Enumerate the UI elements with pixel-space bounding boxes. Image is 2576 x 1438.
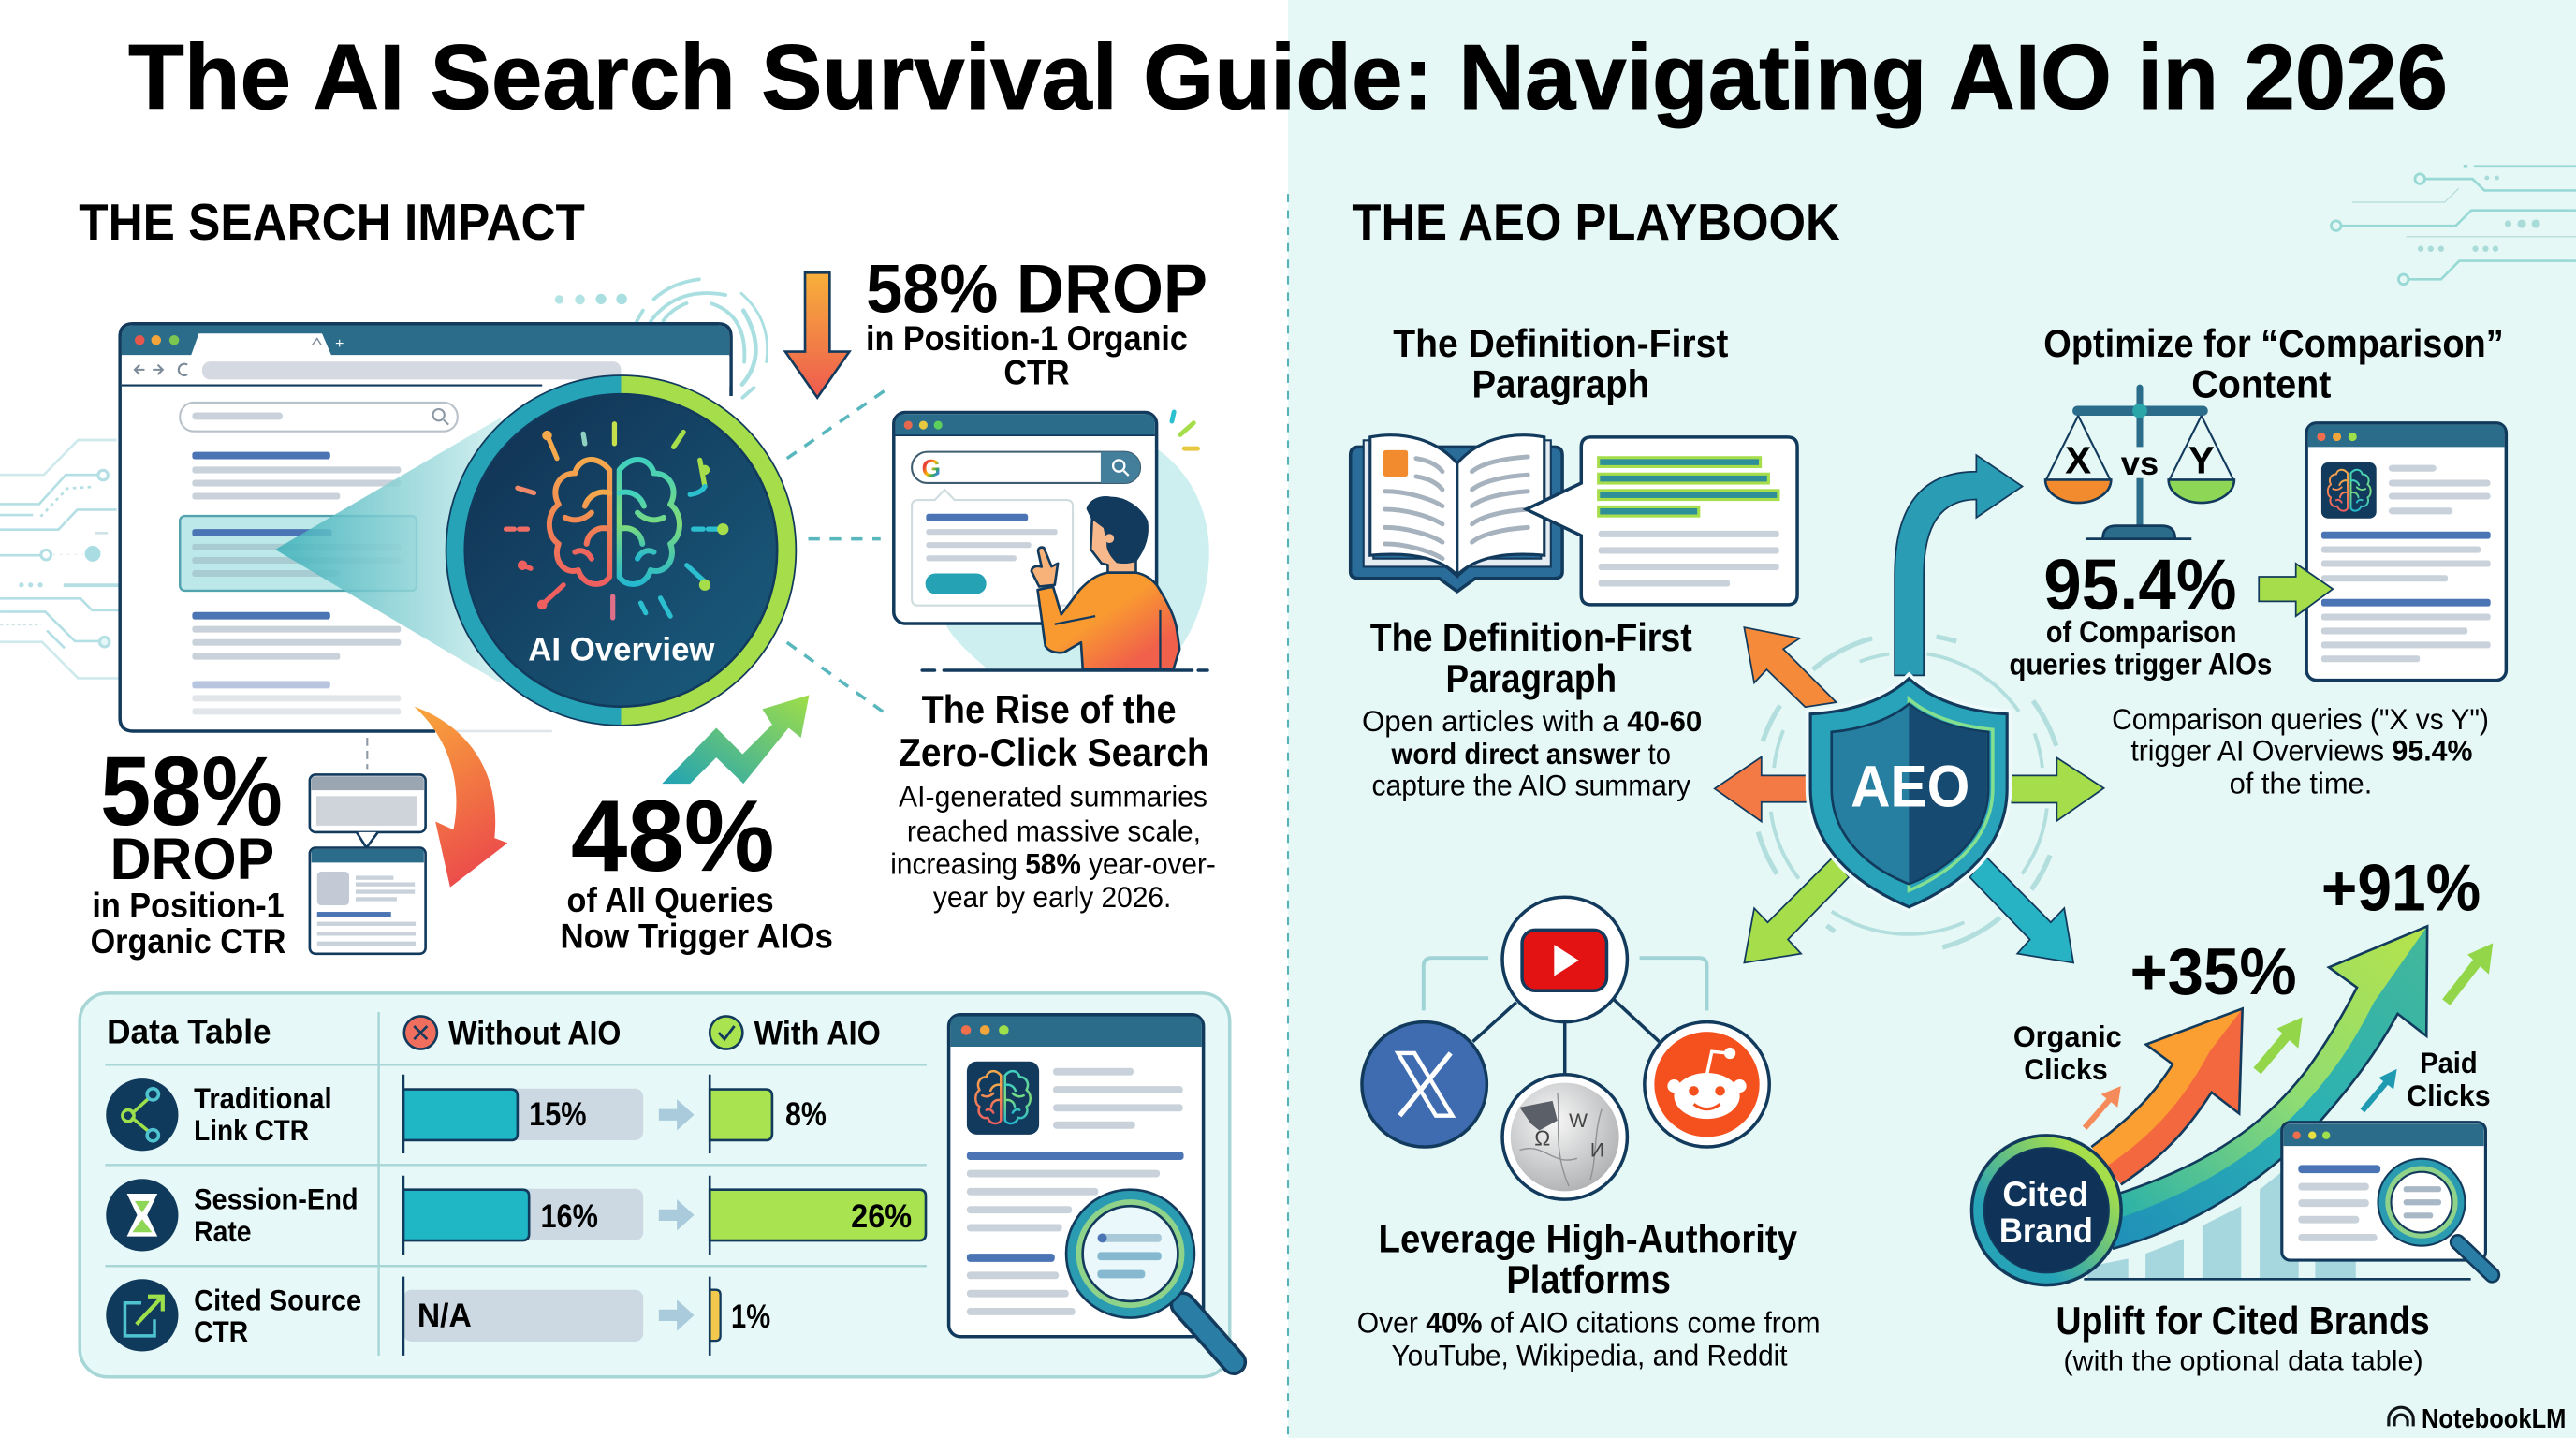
heading: optimize for comparison: Content [2191, 362, 2331, 406]
icon: browser after [310, 848, 426, 954]
text: high-authority platforms: Leverage High-Authority [1379, 1216, 1798, 1260]
magnifier [1183, 1304, 1234, 1362]
stat: 58% drop top: in Position-1 Organic [866, 319, 1188, 358]
person [1032, 497, 1179, 669]
backdrop blob [945, 449, 1209, 668]
text: high-authority platforms: YouTube, Wikipedia, and Reddit [1392, 1338, 1788, 1372]
text: uplift for cited brands: Uplift for Cited Brands [2056, 1299, 2430, 1343]
arrow: paid clicks big [2113, 926, 2427, 1249]
stat: 58% drop lower: DROP [110, 827, 274, 892]
divider [1287, 194, 1289, 1438]
panel: data table [80, 993, 1230, 1377]
chart: uplift growth [1971, 850, 2493, 1285]
callout: direct answer card [1526, 437, 1797, 605]
table header: Data Table [107, 1012, 271, 1050]
badge label: AI Overview [528, 632, 715, 668]
arrow: green right [2011, 757, 2104, 821]
icon: x [1362, 1022, 1486, 1147]
small trend arrows [2085, 943, 2493, 1128]
icon: red down arrow [785, 272, 849, 398]
icon: wikipedia: W [1569, 1110, 1588, 1132]
brain tile [967, 1062, 1039, 1135]
cited brand badge: Brand [1999, 1211, 2093, 1250]
arrow: to comparison content [1895, 455, 2022, 675]
icon: balance scale: X [2065, 438, 2091, 481]
dashed connectors [787, 388, 889, 714]
search box [180, 403, 458, 432]
arrow: orange left [1715, 757, 1808, 822]
stat: 48% of queries [561, 779, 833, 956]
row: traditional link CTR: Link CTR [194, 1113, 309, 1147]
address bar [122, 357, 729, 386]
stat: 58% drop top: CTR [1003, 354, 1070, 392]
cited brand badge [1971, 1136, 2121, 1285]
row: session-end rate: Session-End [194, 1182, 359, 1216]
text: high-authority platforms [1357, 1216, 1821, 1372]
labels: +35% [2130, 934, 2297, 1008]
text: comparison queries: of the time. [2230, 767, 2372, 800]
row: session-end rate: 26% [851, 1198, 912, 1235]
row: traditional link CTR [106, 1075, 827, 1153]
text: uplift for cited brands: (with the optional data table) [2063, 1346, 2423, 1377]
heading: definition-first top: The Definition-First [1393, 321, 1728, 365]
document: comparison page [2306, 423, 2506, 681]
text: rise of zero-click search: year by early 2026. [933, 880, 1171, 914]
chart: uplift growth: Clicks [2407, 1078, 2491, 1112]
row: traditional link CTR: 15% [529, 1096, 587, 1133]
cited brand badge: Cited [2002, 1175, 2089, 1213]
stat: 58% drop lower [91, 737, 285, 961]
chart: uplift growth: Paid [2420, 1046, 2478, 1079]
chart: uplift growth: Clicks [2024, 1052, 2108, 1086]
arrow: organic clicks [2091, 1008, 2243, 1184]
stat: 58% drop top: 58% DROP [866, 249, 1208, 327]
text: uplift for cited brands [2056, 1299, 2430, 1377]
heading: optimize for comparison [2043, 321, 2504, 406]
icon: AEO shield: AEO [1851, 755, 1969, 820]
brain icon [549, 460, 680, 584]
title: The AI Search Survival Guide: Navigating AIO in 2026 [128, 25, 2448, 128]
table header [107, 1012, 881, 1051]
text: rise of zero-click search: reached massive scale, [907, 814, 1201, 848]
row: cited source CTR: N/A [417, 1298, 472, 1334]
stat: 48% of queries: of All Queries [567, 881, 774, 919]
text: rise of zero-click search: Zero-Click Search [899, 730, 1209, 774]
icon: curved drop arrow [414, 707, 507, 888]
heading: definition-first top [1393, 321, 1728, 406]
illustration: person at search window: G [922, 454, 941, 482]
diagram: authority platforms [1362, 897, 1769, 1199]
background: right tinted panel [1288, 0, 2576, 1438]
result lines [192, 452, 330, 460]
row: cited source CTR: CTR [194, 1314, 248, 1348]
icon: browser before [310, 774, 426, 848]
heading: definition-first top: Paragraph [1472, 362, 1649, 406]
text: rise of zero-click search: increasing 58% year-over- [890, 847, 1216, 881]
mini browser [2282, 1123, 2485, 1260]
text: high-authority platforms: Over 40% of AIO citations come from [1357, 1305, 1821, 1339]
table header: With AIO [754, 1015, 881, 1051]
brain rays [506, 424, 728, 618]
text: rise of zero-click search: The Rise of the [922, 687, 1177, 731]
text: definition-first paragraph: capture the AIO summary [1372, 768, 1690, 801]
stat: 95.4%: of Comparison [2046, 615, 2237, 649]
ground line [922, 669, 1208, 671]
text: rise of zero-click search: AI-generated summaries [899, 780, 1208, 814]
stat: 48% of queries: Now Trigger AIOs [561, 917, 833, 956]
magnifier [2458, 1242, 2492, 1275]
icon: wikipedia [1502, 1075, 1627, 1199]
icon: zigzag growth arrow [662, 695, 809, 784]
text: definition-first paragraph: Open articles with a 40-60 [1362, 704, 1702, 738]
icon: wikipedia: Ω [1534, 1125, 1550, 1150]
stat: 58% drop top [866, 249, 1208, 392]
background bars [2087, 1158, 2356, 1278]
icon: wikipedia: И [1590, 1140, 1604, 1162]
highlighted result [180, 516, 417, 591]
icon: youtube [1502, 897, 1627, 1022]
chart: uplift growth: +91% [2321, 850, 2481, 924]
icon: balance scale: vs [2121, 446, 2159, 482]
arrow: teal down-right [1969, 857, 2073, 962]
stat: 95.4%: queries trigger AIOs [2009, 647, 2272, 681]
background: left white panel [0, 0, 1288, 1438]
arrow: green down-left [1744, 857, 1849, 962]
row: session-end rate [106, 1176, 926, 1255]
text: high-authority platforms: Platforms [1506, 1257, 1671, 1301]
arrow: green to document [2259, 564, 2333, 616]
stat: 58% drop lower: 58% [100, 737, 283, 846]
decorative circuit left [0, 440, 118, 678]
dashed drop line [366, 738, 368, 769]
heading: the search impact: THE SEARCH IMPACT [79, 194, 585, 251]
chart: uplift growth: Organic [2013, 1020, 2122, 1053]
sparkles [1172, 412, 1197, 448]
text: comparison queries: Comparison queries ("X vs Y") [2112, 702, 2489, 736]
text: definition-first paragraph [1362, 615, 1702, 801]
document with magnifier [949, 1015, 1234, 1362]
text: rise of zero-click search [890, 687, 1216, 914]
shield halo [1810, 679, 2007, 907]
browser window with search results [120, 324, 731, 731]
text: comparison queries [2112, 702, 2489, 800]
arrow: orange up-left [1744, 627, 1837, 707]
browser frame [120, 324, 731, 731]
row: cited source CTR [106, 1277, 770, 1356]
text: definition-first paragraph: The Definition-First [1370, 615, 1692, 659]
row: session-end rate: 16% [540, 1198, 598, 1235]
row: traditional link CTR: Traditional [194, 1081, 332, 1115]
illustration: person at search window [894, 413, 1209, 669]
stat: 95.4% [2009, 545, 2272, 681]
result card [912, 490, 1073, 606]
row: traditional link CTR: 8% [785, 1096, 827, 1133]
stat: 48% of queries: 48% [571, 779, 775, 893]
heading: the AEO playbook: THE AEO PLAYBOOK [1352, 194, 1840, 251]
small browser [894, 413, 1157, 624]
row: session-end rate: Rate [194, 1214, 252, 1248]
signal waves decoration [555, 279, 768, 398]
projection beam [275, 418, 501, 683]
text: definition-first paragraph: word direct answer to [1391, 737, 1671, 770]
row: cited source CTR: 1% [731, 1299, 770, 1335]
table header: Without AIO [448, 1015, 621, 1051]
icon: balance scale [2045, 388, 2234, 539]
icon: AEO shield [1810, 679, 2007, 907]
google search bar [912, 452, 1140, 483]
row: cited source CTR: Cited Source [194, 1284, 361, 1317]
icon: open book [1351, 435, 1562, 592]
rings around shield [1758, 637, 2056, 947]
icon: balance scale: Y [2188, 438, 2215, 481]
heading: optimize for comparison: Optimize for “Comparison” [2043, 321, 2504, 365]
decorative circuit right [2331, 166, 2576, 285]
icon: reddit [1645, 1022, 1769, 1147]
browser window with search results: + [335, 336, 344, 352]
stat: 58% drop lower: in Position-1 [92, 886, 285, 924]
AI overview badge [446, 374, 797, 726]
text: definition-first paragraph: Paragraph [1445, 656, 1617, 700]
text: comparison queries: trigger AI Overviews 95.4% [2130, 734, 2472, 768]
stat: 95.4%: 95.4% [2043, 545, 2237, 625]
browser header [122, 325, 729, 355]
stat: 58% drop lower: Organic CTR [91, 922, 285, 961]
